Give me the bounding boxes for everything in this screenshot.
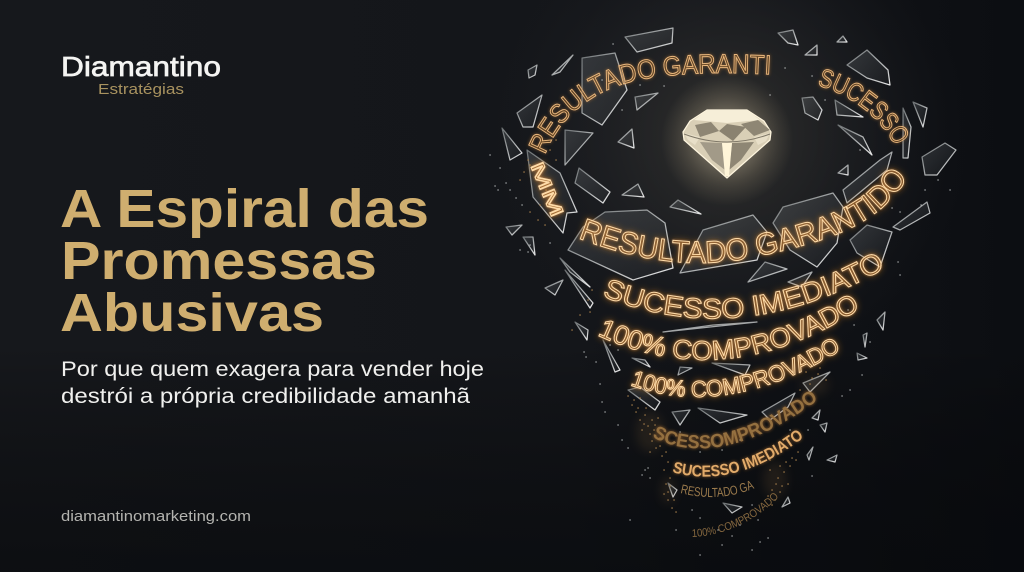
top ring text: sucesso: SUCESSO xyxy=(817,67,910,145)
website url: diamantinomarketing.com xyxy=(61,508,251,525)
title: A Espiral das xyxy=(60,179,429,239)
glass particles xyxy=(490,44,950,555)
gold dust clouds xyxy=(636,375,829,504)
left ring fragment: MM xyxy=(527,158,568,220)
top ring text: resultado garantido: RESULTADO GARANTI xyxy=(526,52,772,155)
icon: diamond xyxy=(683,110,771,178)
subtitle xyxy=(61,357,484,408)
logo xyxy=(61,51,221,98)
logo name: Diamantino xyxy=(61,51,221,82)
dust particles xyxy=(490,44,950,555)
title: Promessas xyxy=(61,231,377,291)
spiral text: 100% comprovado: 100% COMPROVADO xyxy=(596,292,861,365)
spiral text: fading word: SCESSOMPROVADO xyxy=(652,390,818,451)
diamond glow xyxy=(661,74,793,206)
spiral text: sucesso imediato small: SUCESSO IMEDIATO xyxy=(672,428,804,479)
spiral text: 100% comprovado smaller: 100% COMPROVADO xyxy=(628,334,842,402)
spiral text: tiny comprovado: 100% COMPROVADO xyxy=(692,493,778,537)
front ring text: resultado garantido: RESULTADO GARANTIDO xyxy=(576,166,908,268)
gold particles xyxy=(520,140,826,512)
logo subtitle: Estratégias xyxy=(98,81,184,98)
title xyxy=(60,179,429,343)
title: Abusivas xyxy=(60,283,324,343)
spiral text: sucesso imediato: SUCESSO IMEDIATO xyxy=(600,250,886,324)
spiral text: resultado fading: RESULTADO GA xyxy=(681,480,754,498)
subtitle: destrói a própria credibilidade amanhã xyxy=(61,384,470,408)
subtitle: Por que quem exagera para vender hoje xyxy=(61,357,484,381)
glass shards xyxy=(502,28,956,513)
spiral text xyxy=(526,52,910,537)
